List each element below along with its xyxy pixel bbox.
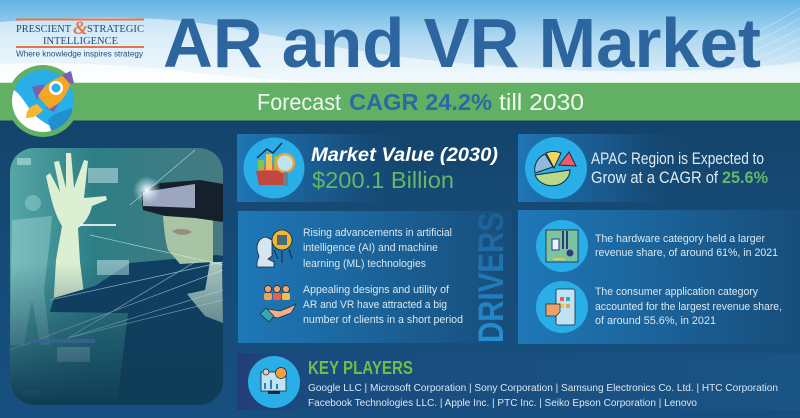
driver text: design and utility: Appealing designs and utility of — [303, 284, 450, 296]
header sky band — [0, 0, 800, 83]
panel: category shares — [518, 210, 800, 344]
icon: phone with apps — [536, 281, 588, 333]
mouth — [172, 229, 192, 235]
light rays — [10, 150, 223, 350]
driver text: design and utility: AR and VR have attracted a big — [303, 299, 447, 311]
raised hand and arm — [46, 153, 107, 310]
icon: pie chart — [525, 137, 587, 199]
green forecast banner: CAGR 24.2% — [349, 89, 492, 115]
hardware text — [595, 233, 778, 259]
icon: people in hand — [260, 286, 296, 322]
logo: STRATEGIC — [87, 23, 144, 35]
consumer application text: of around 55.6%, in 2021 — [595, 315, 716, 327]
driver text: design and utility — [303, 284, 463, 326]
logo: INTELLIGENCE — [43, 35, 118, 47]
rocket badge — [12, 65, 74, 137]
driver text: AI and ML — [303, 227, 452, 270]
second hand — [187, 262, 223, 323]
hologram body — [10, 195, 52, 345]
APAC text: Grow at a CAGR of — [591, 168, 718, 187]
logo: PRESCIENT — [16, 23, 71, 35]
green forecast banner: till 2030 — [499, 89, 584, 115]
consumer application text — [595, 286, 782, 327]
driver text: AI and ML: Rising advancements in artificial — [303, 227, 452, 239]
driver text: AI and ML: learning (ML) technologies — [303, 258, 426, 270]
hardware text: The hardware category held a larger — [595, 233, 765, 245]
market value number: $200.1 Billion — [312, 167, 454, 193]
logo: Where knowledge inspires strategy — [16, 50, 143, 58]
panel: key players — [237, 353, 800, 410]
panel: APAC region — [518, 134, 768, 202]
APAC text — [591, 149, 768, 187]
logo — [16, 18, 144, 58]
panel: market value — [237, 134, 498, 202]
hardware text: revenue share, of around 61%, in 2021 — [595, 247, 778, 259]
icon: circuit board — [536, 220, 588, 272]
icon: market chart and magnifier — [244, 138, 304, 198]
driver text: AI and ML: intelligence (AI) and machine — [303, 242, 438, 254]
key players list: Google LLC | Microsoft Corporation | Sony Corporation | Samsung Electronics Co. Ltd. | HTC Corporation — [308, 382, 778, 394]
icon: AI head with chip — [257, 230, 292, 267]
neck and face — [163, 215, 213, 264]
APAC text: APAC Region is Expected to — [591, 149, 764, 168]
logo: & — [73, 18, 88, 39]
drivers vertical label: DRIVERS — [472, 212, 511, 343]
photo: person in VR headset — [10, 148, 223, 405]
icon: monitor with targets — [248, 356, 300, 408]
key players list — [308, 382, 778, 409]
consumer application text: The consumer application category — [595, 286, 758, 298]
glare and data chips — [134, 177, 160, 202]
key players list: Facebook Technologies LLC. | Apple Inc. | PTC Inc. | Seiko Epson Corporation | Lenovo — [308, 397, 697, 409]
panel: drivers — [238, 211, 512, 343]
market value label: Market Value (2030) — [311, 145, 498, 166]
APAC text: 25.6% — [722, 168, 768, 187]
green forecast banner: Forecast — [257, 89, 342, 115]
consumer application text: accounted for the largest revenue share, — [595, 301, 782, 313]
driver text: design and utility: number of clients in a short period — [303, 314, 463, 326]
green forecast banner — [0, 82, 800, 120]
shirt and torso — [50, 255, 223, 405]
title: AR and VR Market — [163, 4, 761, 82]
key players heading: KEY PLAYERS — [308, 358, 413, 378]
headset — [141, 180, 223, 222]
